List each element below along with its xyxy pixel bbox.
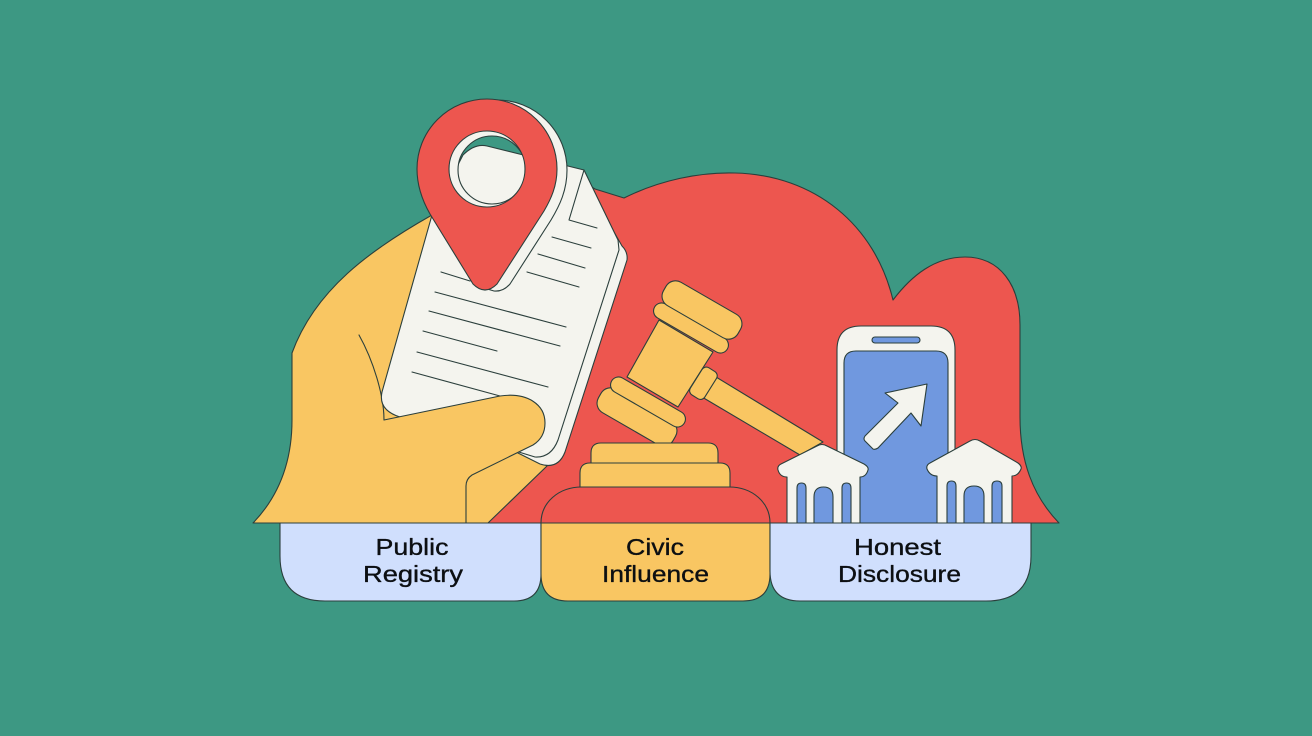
label panel	[541, 523, 770, 601]
gavel body	[627, 320, 713, 407]
label text: Public	[376, 534, 448, 560]
label: Honest Disclosure	[770, 523, 1031, 601]
gavel handle	[702, 377, 823, 455]
phone body	[837, 326, 955, 523]
left building body and roof	[778, 444, 868, 523]
red dome	[541, 487, 770, 523]
label: Civic Influence	[541, 523, 770, 601]
red backdrop shape	[488, 173, 1059, 523]
icon: location pin	[417, 99, 567, 291]
label text: Honest	[854, 534, 942, 560]
gavel upper band	[651, 300, 731, 356]
upper step	[591, 443, 718, 463]
icon: gavel	[593, 277, 823, 455]
icon: hand holding document	[253, 145, 627, 523]
phone speaker	[872, 337, 920, 343]
right building windows	[947, 481, 1002, 523]
thumb fill	[330, 395, 545, 523]
lower step	[580, 463, 730, 487]
gavel lower band	[608, 374, 688, 430]
icon: right bank building	[927, 440, 1021, 523]
label panel	[280, 523, 541, 601]
label panel	[770, 523, 1031, 601]
right building body and roof	[927, 440, 1021, 523]
pin front	[417, 99, 557, 290]
gavel collar	[688, 365, 719, 401]
up-right arrow	[864, 384, 927, 449]
icon: left bank building	[778, 444, 868, 523]
label text second line: Registry	[363, 561, 464, 587]
thumb outline	[384, 395, 545, 523]
gavel upper cap	[658, 277, 746, 343]
gavel lower cap	[593, 384, 681, 450]
back sheet of document	[500, 225, 627, 466]
label: Public Registry	[280, 523, 541, 601]
label text second line: Influence	[602, 561, 709, 587]
hand palm	[253, 215, 560, 523]
label text second line: Disclosure	[838, 561, 961, 587]
left building windows	[797, 483, 851, 523]
document text lines	[412, 170, 597, 396]
icon: smartphone	[837, 326, 955, 523]
hand crease	[359, 335, 384, 420]
gavel sound block	[541, 443, 770, 523]
front sheet of document	[381, 145, 619, 457]
label text: Civic	[626, 534, 684, 560]
pin back layer	[430, 100, 567, 291]
phone screen	[844, 351, 948, 523]
